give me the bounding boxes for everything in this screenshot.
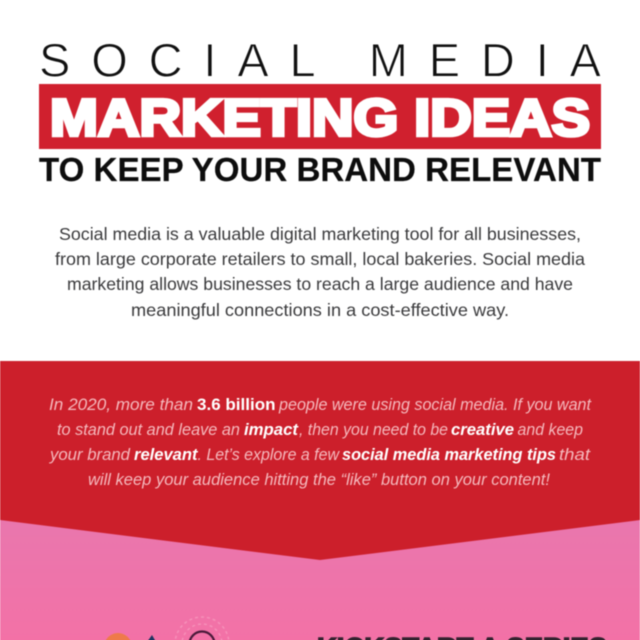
intro paragraph: marketing allows businesses to reach a large audience and have <box>67 274 573 294</box>
title line: social media: SOCIAL MEDIA <box>39 34 602 86</box>
red panel statement: creative <box>451 420 514 439</box>
red panel statement: to stand out and leave an <box>57 420 240 439</box>
red chevron panel <box>0 361 640 560</box>
intro paragraph: Social media is a valuable digital marketing tool for all businesses, <box>59 224 581 244</box>
red panel statement: impact <box>244 420 299 439</box>
red panel statement <box>49 395 592 489</box>
icon: orange circle <box>104 633 132 640</box>
red panel statement: , then you need to be <box>299 420 448 439</box>
icon: navy figure <box>147 635 156 640</box>
pink lower section <box>0 515 640 640</box>
intro paragraph <box>55 224 585 320</box>
red panel statement: people were using social media. If you want <box>278 395 592 414</box>
title line: to keep your brand relevant: TO KEEP YOUR BRAND RELEVANT <box>39 151 601 188</box>
icon: magnifier with dashed rings <box>175 617 229 640</box>
title banner: MARKETING IDEAS <box>50 90 590 148</box>
intro paragraph: meaningful connections in a cost-effective way. <box>131 300 509 320</box>
intro paragraph: from large corporate retailers to small, local bakeries. Social media <box>55 249 585 269</box>
red panel statement: your brand <box>49 445 131 464</box>
title block <box>39 34 602 188</box>
red panel statement: and keep <box>518 420 583 439</box>
red panel statement: will keep your audience hitting the “like” button on your content! <box>88 470 550 489</box>
red panel statement: . Let’s explore a few <box>198 445 341 464</box>
red panel statement: relevant <box>134 445 199 464</box>
red panel statement: 3.6 billion <box>197 395 276 414</box>
red panel statement: social media marketing tips <box>342 445 556 464</box>
page background <box>0 0 640 362</box>
red panel statement: In 2020, more than <box>49 395 193 414</box>
red panel statement: that <box>559 445 591 464</box>
